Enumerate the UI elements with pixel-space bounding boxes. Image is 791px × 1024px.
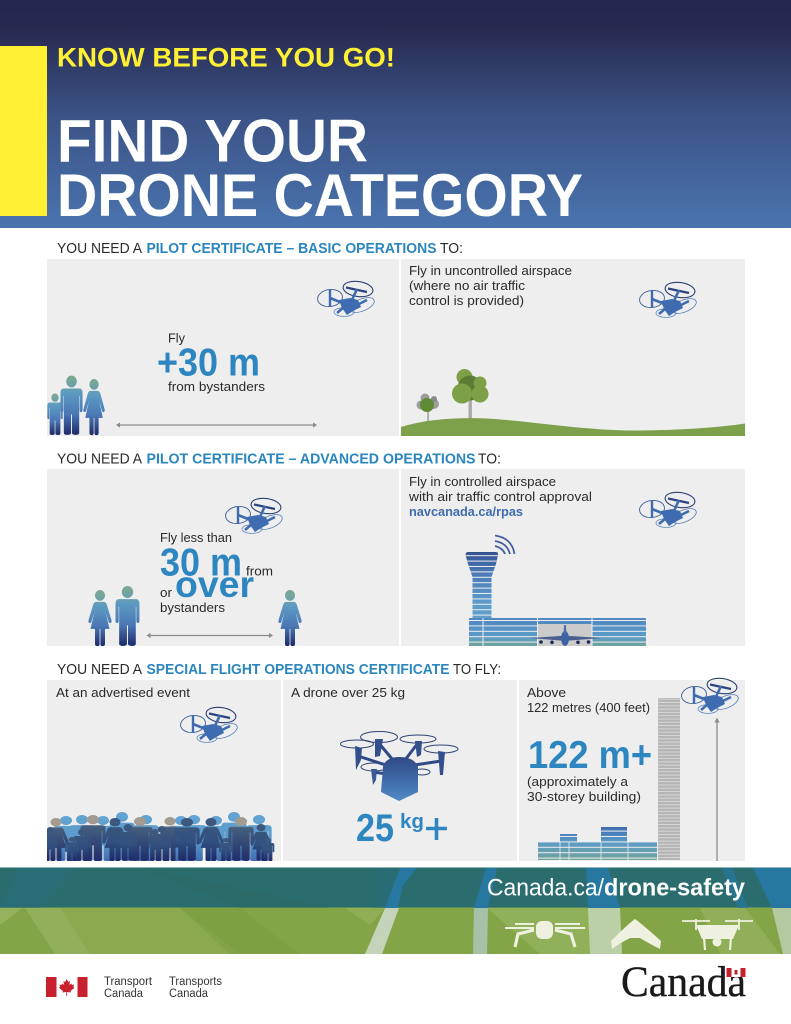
text: uncontrolled airspace: Fly in uncontrolled airspace bbox=[409, 264, 572, 278]
icon: single bystander bbox=[278, 590, 302, 646]
arrow: height bbox=[714, 718, 720, 861]
stat: 25 kg+: kg bbox=[400, 811, 424, 833]
icon: drone bbox=[680, 676, 740, 713]
icon: small tree bbox=[416, 394, 439, 422]
panel: drone over 25 kg bbox=[283, 680, 517, 861]
panel: fly 30 m from bystanders bbox=[47, 259, 399, 436]
panel: advertised event bbox=[43, 680, 281, 861]
low buildings bbox=[538, 827, 657, 860]
terminal building bbox=[469, 618, 646, 646]
icon: airplane bbox=[530, 625, 602, 646]
text: uncontrolled airspace: (where no air traffic bbox=[409, 279, 525, 293]
stat: +30 m: +30 m bbox=[157, 342, 260, 384]
arrow: distance bbox=[116, 422, 317, 428]
icon: drone bbox=[638, 280, 698, 317]
text: transports canada: Canada bbox=[169, 988, 209, 1000]
icon: family group bbox=[47, 376, 105, 435]
text: or: or bbox=[160, 586, 172, 600]
icon: large tree bbox=[452, 369, 488, 419]
link: canada.ca/drone-safety: Canada.ca/ bbox=[487, 874, 604, 902]
text: uncontrolled airspace: control is provided) bbox=[409, 294, 524, 308]
icon: drone bbox=[179, 705, 239, 742]
link: navcanada: navcanada.ca/rpas bbox=[409, 505, 523, 519]
text: transports canada: Transports bbox=[169, 976, 222, 988]
stat: over: over bbox=[175, 564, 254, 605]
text: drone over 25 kg: A drone over 25 kg bbox=[291, 686, 405, 700]
link: canada.ca/drone-safety: drone-safety bbox=[604, 874, 745, 902]
text: fly less than: Fly less than bbox=[160, 531, 232, 545]
icon: drone bbox=[224, 496, 284, 533]
main title: FIND YOUR bbox=[57, 108, 368, 174]
stat: 25 kg+ bbox=[356, 807, 447, 850]
section heading: advanced operations: YOU NEED A bbox=[57, 452, 142, 468]
icon: heavy drone bbox=[340, 732, 458, 801]
icon: control tower bbox=[466, 536, 514, 618]
section heading: advanced operations: PILOT CERTIFICATE – ADVANCED OPERATIONS bbox=[146, 452, 476, 468]
tall grey building bbox=[658, 698, 680, 860]
icon: drone bbox=[316, 279, 376, 316]
icon: radio waves bbox=[495, 536, 514, 554]
panel: fly less than 30 m bbox=[47, 469, 399, 646]
stat: 122 m+: 122 m+ bbox=[528, 734, 652, 777]
text: bystanders: bystanders bbox=[160, 601, 225, 615]
arrow: distance bbox=[146, 633, 273, 638]
text: approximately a 30-storey building: (approximately a bbox=[527, 775, 628, 789]
ground hill bbox=[401, 418, 745, 436]
logo: transport canada signature bbox=[46, 976, 222, 1000]
text: above 122 metres: Above bbox=[527, 686, 566, 700]
stat: 25 kg+: 25 bbox=[356, 807, 394, 850]
text: fly: Fly bbox=[168, 332, 186, 346]
section heading: advanced operations: TO: bbox=[478, 452, 501, 468]
logo: canada wordmark: Canada bbox=[621, 959, 746, 1006]
text: above 122 metres: 122 metres (400 feet) bbox=[527, 701, 650, 715]
text: from bystanders: from bystanders bbox=[168, 380, 265, 394]
panel: uncontrolled airspace bbox=[401, 259, 745, 436]
yellow accent bar bbox=[0, 46, 47, 216]
icon: drone bbox=[638, 490, 698, 527]
text: advertised event: At an advertised event bbox=[56, 686, 191, 700]
panel: controlled airspace bbox=[401, 469, 745, 646]
stat: 30 m: 30 m bbox=[160, 542, 242, 584]
text: controlled airspace: with air traffic control approval bbox=[408, 490, 592, 504]
icon: canadian flag bbox=[46, 977, 88, 997]
section heading: special flight operations: TO FLY: bbox=[453, 662, 501, 678]
kicker: know before you go: KNOW BEFORE YOU GO! bbox=[57, 42, 395, 72]
icon: camera drone silhouette bbox=[682, 919, 753, 950]
text: transport canada: Canada bbox=[104, 988, 144, 1000]
icon: crowd bbox=[43, 812, 274, 861]
section heading: special flight operations: YOU NEED A bbox=[57, 662, 142, 678]
main title: DRONE CATEGORY bbox=[57, 162, 583, 229]
header banner bbox=[0, 0, 791, 229]
section heading: special flight operations: SPECIAL FLIGHT OPERATIONS CERTIFICATE bbox=[146, 662, 450, 678]
section heading: basic operations: PILOT CERTIFICATE – BASIC OPERATIONS bbox=[146, 241, 437, 257]
text: approximately a 30-storey building: 30-storey building) bbox=[527, 790, 641, 804]
footer band bbox=[0, 868, 791, 954]
text: from: from bbox=[246, 564, 273, 578]
text: controlled airspace: Fly in controlled airspace bbox=[409, 475, 556, 489]
text: transport canada: Transport bbox=[104, 976, 153, 988]
icon: wordmark flag bbox=[726, 968, 746, 977]
section heading: basic operations: TO: bbox=[440, 241, 463, 257]
section heading: basic operations: YOU NEED A bbox=[57, 241, 142, 257]
icon: two bystanders bbox=[88, 586, 139, 646]
icon: quadcopter silhouette bbox=[505, 921, 585, 947]
icon: fixed-wing silhouette bbox=[611, 919, 661, 949]
panel: above 122 metres bbox=[519, 676, 745, 861]
